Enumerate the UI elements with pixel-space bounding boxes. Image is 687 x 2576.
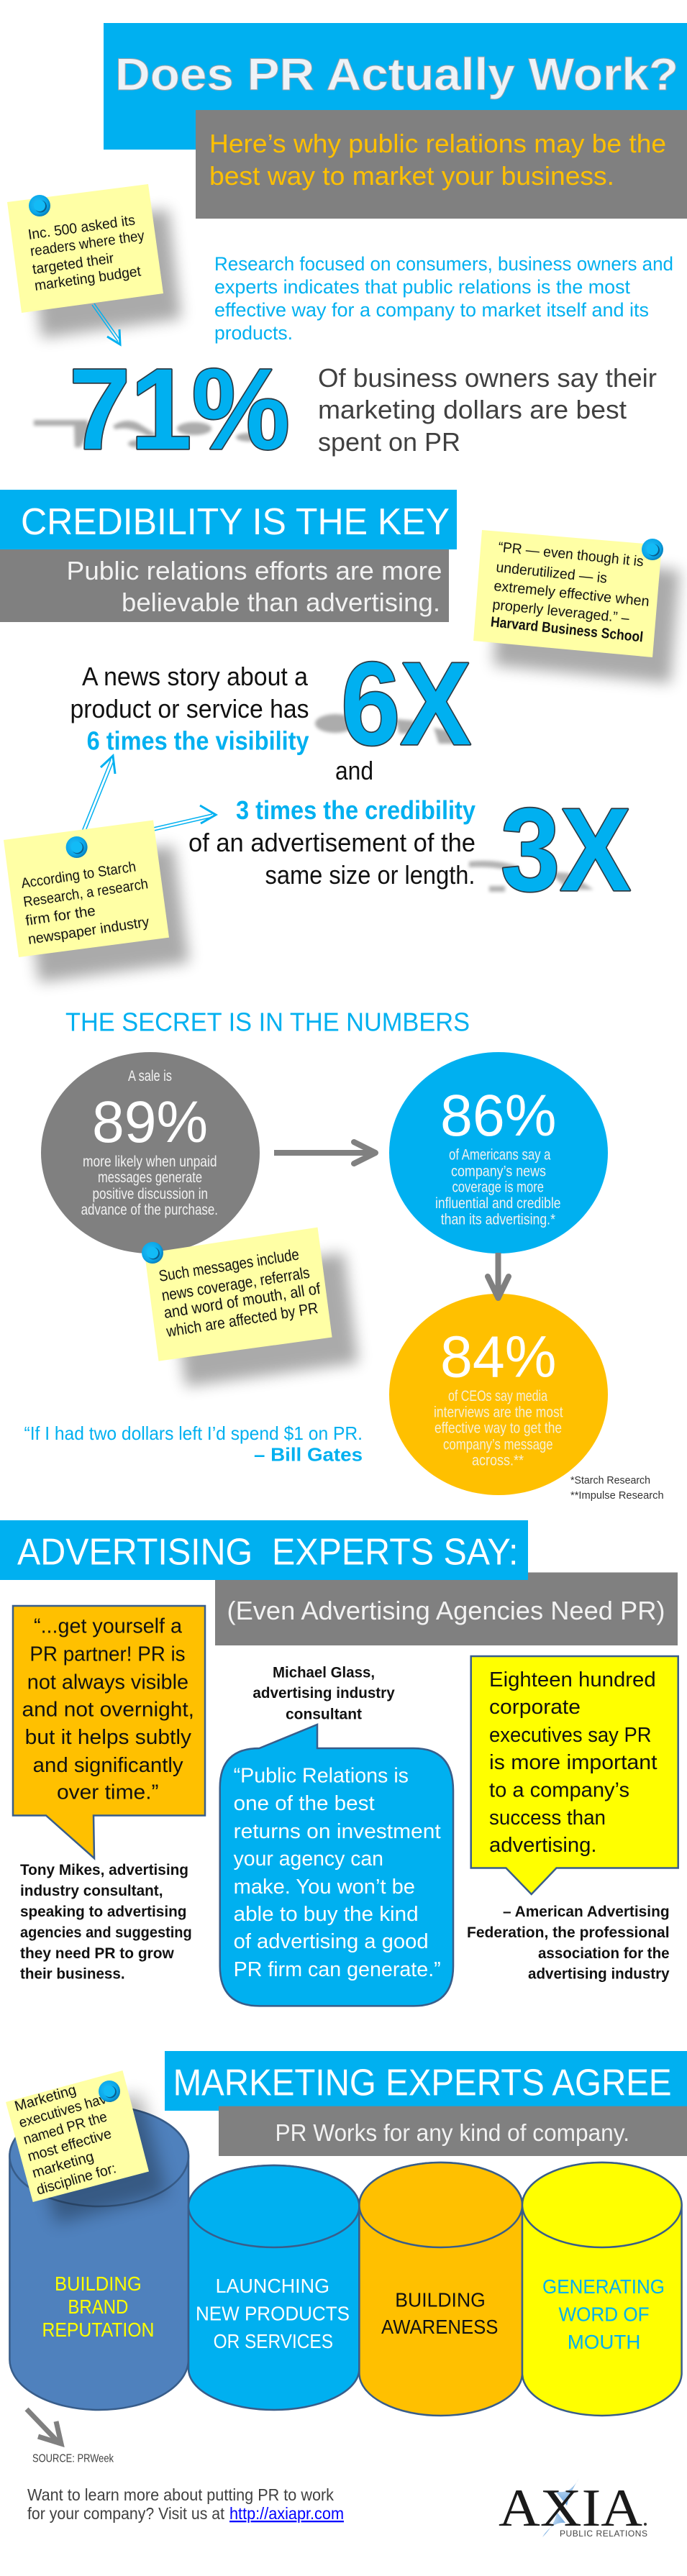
cylinder: brand reputation bbox=[9, 2106, 188, 2410]
sticky note: Harvard bbox=[473, 530, 680, 683]
attribution: Michael Glass: advertising industry bbox=[252, 1685, 395, 1702]
note text: named PR the bbox=[22, 2109, 109, 2148]
intro paragraph: experts indicates that public relations is the most bbox=[214, 276, 630, 298]
cylinder: word of mouth: WORD OF bbox=[558, 2303, 650, 2325]
subheading: credibility bbox=[0, 549, 449, 622]
text: 6 times bbox=[70, 662, 309, 755]
circle: 86%: influential and credible bbox=[435, 1195, 561, 1212]
circle: 89%: A sale is bbox=[128, 1068, 172, 1084]
circle: 84% bbox=[389, 1294, 608, 1495]
circle: 86%: 86% bbox=[440, 1083, 557, 1148]
callout: yellow statement: corporate bbox=[489, 1696, 581, 1719]
circle: 86%: company’s news bbox=[451, 1164, 546, 1179]
call to action: for your company? Visit us at bbox=[27, 2504, 225, 2523]
note text: “PR — even though it is bbox=[497, 539, 645, 570]
text: 6 times: A news story about a bbox=[82, 662, 309, 691]
text: 3 times: 3 times the credibility bbox=[236, 795, 476, 825]
attribution: Michael Glass bbox=[252, 1664, 395, 1722]
text: 6 times: product or service has bbox=[70, 694, 309, 723]
cylinder: awareness: AWARENESS bbox=[381, 2316, 498, 2338]
attribution: AAF: – American Advertising bbox=[503, 1904, 670, 1920]
title text: Does PR Actually Work? bbox=[115, 50, 678, 100]
intro paragraph: Research focused on consumers, business owners and bbox=[214, 253, 673, 275]
callout: yellow statement: advertising. bbox=[489, 1834, 597, 1857]
note text: Harvard Business School bbox=[490, 614, 644, 645]
note text: Inc. 500 asked its bbox=[27, 212, 136, 243]
attribution: Tony Mikes: Tony Mikes, advertising bbox=[20, 1862, 188, 1878]
stat: 71%: 71% bbox=[69, 344, 290, 473]
callout: orange quote: PR partner! PR is bbox=[29, 1643, 186, 1666]
attribution: Tony Mikes: agencies and suggesting bbox=[20, 1924, 192, 1941]
cylinder: new products: NEW PRODUCTS bbox=[196, 2302, 350, 2324]
heading: advertising experts bbox=[0, 1520, 528, 1580]
attribution: AAF: advertising industry bbox=[528, 1966, 670, 1983]
cylinder: brand reputation: BRAND bbox=[68, 2296, 128, 2318]
callout: orange quote: not always visible bbox=[27, 1671, 188, 1694]
subtitle text: best way to market your business. bbox=[209, 161, 614, 191]
footnotes: **Impulse Research bbox=[570, 1489, 664, 1502]
note text: Marketing bbox=[13, 2082, 78, 2115]
callout: orange quote: and not overnight, bbox=[22, 1699, 194, 1722]
callout: blue quote: make. You won’t be bbox=[234, 1876, 415, 1899]
circle: 86%: coverage is more bbox=[452, 1179, 544, 1195]
callout: blue quote: PR firm can generate.” bbox=[234, 1958, 441, 1981]
arrow: right bbox=[274, 1142, 376, 1164]
note text bbox=[27, 212, 145, 294]
subheading: credibility: Public relations efforts are more bbox=[66, 556, 442, 585]
heading: advertising experts: ADVERTISING EXPERTS SAY: bbox=[17, 1532, 518, 1574]
text: 3 times: of an advertisement of the bbox=[188, 828, 476, 857]
attribution: Tony Mikes: speaking to advertising bbox=[20, 1904, 186, 1920]
note text: Such messages include bbox=[158, 1245, 300, 1285]
text: 6 times: 6 times the visibility bbox=[87, 726, 309, 755]
circle: 89%: positive discussion in bbox=[92, 1186, 208, 1202]
note text: underutilized — is bbox=[495, 559, 608, 587]
cylinder: new products bbox=[188, 2165, 359, 2410]
text: 3 times: same size or length. bbox=[265, 860, 475, 890]
stat description bbox=[318, 363, 657, 457]
sticky note: Starch bbox=[4, 820, 189, 982]
sticky note: messages bbox=[142, 1228, 358, 1387]
note text: discipline for: bbox=[35, 2160, 118, 2198]
heading: credibility bbox=[0, 490, 457, 549]
pin bbox=[142, 1242, 163, 1264]
circle: 86% bbox=[389, 1052, 608, 1253]
callout: yellow statement: executives say PR bbox=[489, 1724, 652, 1747]
note text: properly leveraged.” – bbox=[491, 597, 631, 626]
logo: AXIA: AXIA bbox=[499, 2479, 642, 2538]
note text: According to Starch bbox=[20, 859, 137, 892]
callout: blue quote bbox=[220, 1725, 453, 2006]
arrow: to source bbox=[27, 2409, 61, 2444]
arrow: down bbox=[488, 1253, 509, 1298]
cylinder: word of mouth: GENERATING bbox=[542, 2275, 665, 2298]
heading: numbers: THE SECRET IS IN THE NUMBERS bbox=[65, 1007, 470, 1037]
logo: AXIA: PUBLIC RELATIONS bbox=[560, 2529, 647, 2539]
pin bbox=[66, 836, 88, 858]
note text: news coverage, referrals bbox=[160, 1264, 311, 1305]
callout: orange quote bbox=[13, 1606, 205, 1858]
circle: 89% bbox=[41, 1052, 260, 1253]
attribution: Michael Glass: consultant bbox=[286, 1706, 362, 1722]
attribution: Tony Mikes bbox=[20, 1862, 192, 1983]
callout: yellow statement: to a company’s bbox=[489, 1779, 629, 1802]
stat description: marketing dollars are best bbox=[318, 395, 627, 424]
circle: 84%: company’s message bbox=[443, 1437, 553, 1453]
circle: 86%: than its advertising.* bbox=[441, 1211, 555, 1228]
note text: firm for the bbox=[24, 903, 96, 929]
quote: Bill Gates: “If I had two dollars left I’d spend $1 on PR. bbox=[24, 1422, 363, 1444]
note text: marketing bbox=[30, 2149, 96, 2181]
circle: 89%: advance of the purchase. bbox=[81, 1202, 218, 1218]
callout: yellow statement: success than bbox=[489, 1807, 606, 1830]
cylinder: brand reputation: REPUTATION bbox=[42, 2319, 154, 2341]
circle: 84%: of CEOs say media bbox=[448, 1388, 547, 1405]
circle: 86%: of Americans say a bbox=[449, 1146, 551, 1164]
callout: yellow statement: Eighteen hundred bbox=[489, 1668, 656, 1691]
stat description: spent on PR bbox=[318, 427, 460, 457]
arrow: note to 71% bbox=[92, 303, 120, 344]
callout: blue quote: returns on investment bbox=[234, 1820, 441, 1843]
note text: Research, a research bbox=[22, 876, 149, 910]
note text bbox=[158, 1245, 322, 1340]
stat: 6X: 6X bbox=[341, 638, 471, 769]
subheading: agencies: (Even Advertising Agencies Need PR) bbox=[227, 1596, 665, 1625]
title banner bbox=[104, 23, 687, 150]
intro paragraph: effective way for a company to market itself and its bbox=[214, 299, 649, 321]
circle: 84%: 84% bbox=[440, 1325, 557, 1390]
circle: 89%: more likely when unpaid bbox=[83, 1154, 217, 1170]
callout: yellow statement bbox=[471, 1656, 678, 1894]
heading: credibility: CREDIBILITY IS THE KEY bbox=[21, 501, 450, 543]
pin bbox=[99, 2081, 120, 2102]
circle: 84%: effective way to get the bbox=[435, 1420, 562, 1437]
note text: most effective bbox=[26, 2126, 114, 2165]
callout: blue quote: able to buy the kind bbox=[234, 1903, 419, 1926]
stat description: Of business owners say their bbox=[318, 363, 657, 393]
callout: orange quote: and significantly bbox=[33, 1754, 183, 1777]
sticky note: Inc. 500 bbox=[7, 184, 181, 338]
note text: newspaper industry bbox=[27, 914, 150, 948]
note text: targeted their bbox=[32, 250, 115, 278]
attribution: AAF: association for the bbox=[538, 1945, 670, 1962]
note text: readers where they bbox=[29, 228, 145, 260]
cylinder: word of mouth: MOUTH bbox=[568, 2331, 640, 2353]
note text bbox=[13, 2082, 118, 2198]
arrows from Starch note bbox=[78, 756, 216, 846]
call to action: http://axiapr.com bbox=[229, 2504, 344, 2523]
call to action bbox=[27, 2485, 344, 2523]
cylinder: word of mouth bbox=[522, 2162, 682, 2416]
subheading: any company bbox=[219, 2106, 687, 2156]
source label: SOURCE: PRWeek bbox=[32, 2452, 114, 2465]
callout: blue quote: your agency can bbox=[234, 1847, 383, 1871]
note text: which are affected by PR bbox=[165, 1299, 319, 1340]
intro paragraph: products. bbox=[214, 322, 293, 344]
note text bbox=[20, 859, 150, 948]
pin bbox=[642, 539, 663, 560]
cylinder: new products: LAUNCHING bbox=[216, 2275, 329, 2297]
circle: 89%: 89% bbox=[92, 1090, 208, 1155]
heading: marketing experts bbox=[165, 2051, 687, 2111]
attribution: Michael Glass: Michael Glass, bbox=[273, 1664, 375, 1681]
footnotes: *Starch Research bbox=[570, 1474, 650, 1486]
note text: and word of mouth, all of bbox=[163, 1279, 322, 1322]
subtitle text bbox=[209, 129, 666, 191]
intro paragraph bbox=[214, 253, 673, 344]
note text bbox=[490, 539, 650, 645]
footnotes bbox=[570, 1474, 664, 1502]
connector word: and bbox=[335, 756, 373, 785]
cylinder: brand reputation: BUILDING bbox=[55, 2273, 142, 2295]
circle: 84%: interviews are the most bbox=[434, 1405, 563, 1421]
pin bbox=[29, 195, 50, 216]
subheading: agencies bbox=[215, 1572, 678, 1645]
attribution: AAF: Federation, the professional bbox=[467, 1924, 670, 1941]
attribution: AAF bbox=[467, 1904, 670, 1983]
note text: marketing budget bbox=[34, 263, 142, 294]
attribution: Tony Mikes: their business. bbox=[20, 1966, 125, 1983]
cylinder: awareness: BUILDING bbox=[395, 2288, 486, 2311]
callout: blue quote: of advertising a good bbox=[234, 1930, 429, 1953]
circle: 89%: messages generate bbox=[98, 1169, 202, 1186]
callout: orange quote: over time.” bbox=[57, 1781, 158, 1804]
note text: extremely effective when bbox=[493, 578, 650, 610]
callout: blue quote: “Public Relations is bbox=[234, 1765, 409, 1788]
quote: Bill Gates bbox=[24, 1422, 363, 1466]
attribution: Tony Mikes: industry consultant, bbox=[20, 1883, 163, 1899]
cylinder: awareness bbox=[359, 2162, 522, 2416]
note text: executives have bbox=[17, 2089, 116, 2131]
callout: orange quote: but it helps subtly bbox=[25, 1726, 192, 1749]
subheading: any company: PR Works for any kind of company. bbox=[275, 2119, 629, 2146]
subtitle panel bbox=[196, 110, 687, 219]
circle: 84%: across.** bbox=[472, 1453, 524, 1469]
text: 3 times bbox=[188, 795, 476, 890]
quote: Bill Gates: – Bill Gates bbox=[254, 1444, 363, 1466]
subheading: credibility: believable than advertising. bbox=[122, 588, 440, 617]
subtitle text: Here’s why public relations may be the bbox=[209, 129, 666, 158]
attribution: Tony Mikes: they need PR to grow bbox=[20, 1945, 174, 1962]
callout: yellow statement: is more important bbox=[489, 1751, 658, 1774]
callout: orange quote: “...get yourself a bbox=[34, 1615, 183, 1638]
call to action: Want to learn more about putting PR to work bbox=[27, 2485, 334, 2504]
cylinder: new products: OR SERVICES bbox=[214, 2330, 333, 2352]
stat: 3X: 3X bbox=[501, 784, 631, 915]
callout: blue quote: one of the best bbox=[234, 1792, 375, 1815]
sticky note: marketing executives bbox=[6, 2070, 167, 2224]
